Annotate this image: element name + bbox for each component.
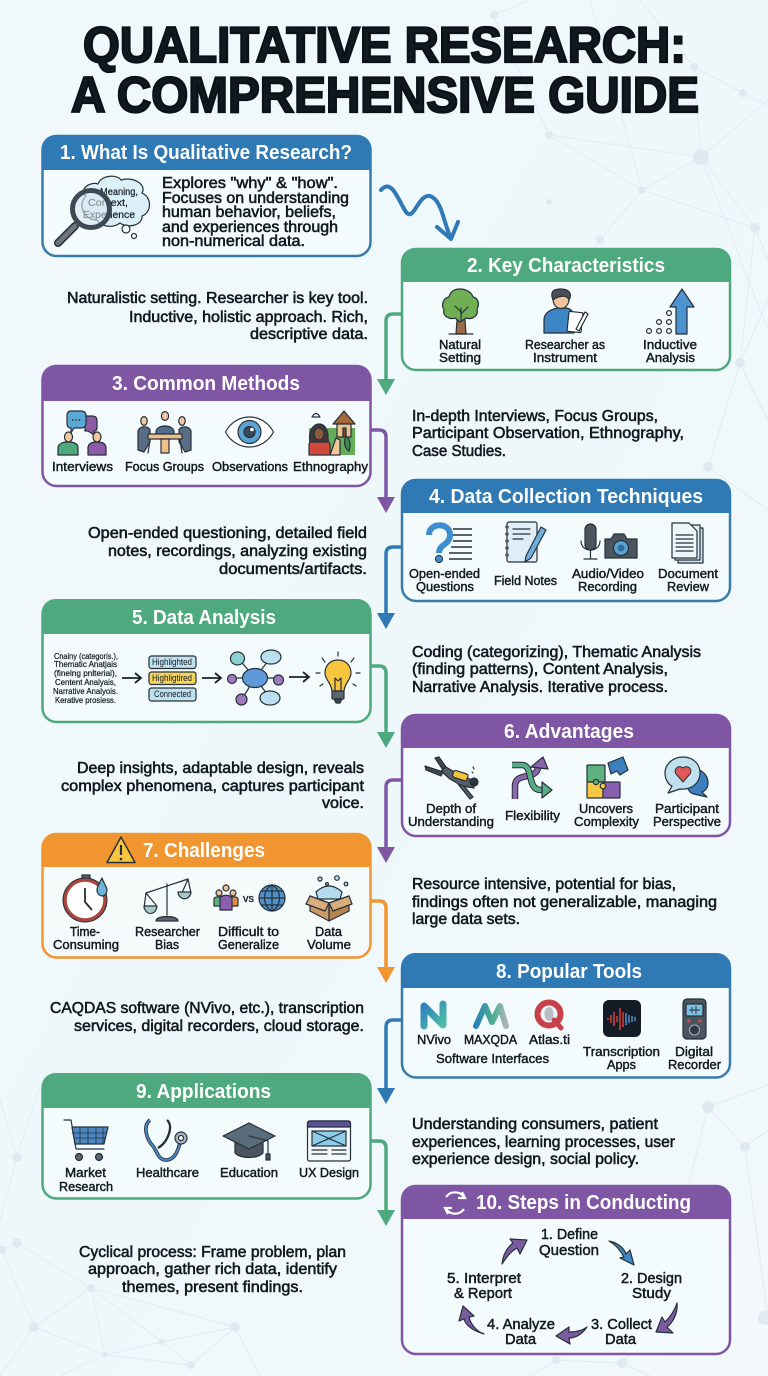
label: Transcription (583, 1045, 660, 1059)
label: Data (315, 925, 342, 939)
text block: common methods summary: Case Studies. (412, 443, 506, 460)
step labels: 1. Define (541, 1227, 598, 1243)
label: Healthcare (136, 1166, 199, 1180)
small text: Centent Analyais, (55, 678, 116, 687)
description: Focuses on understanding (162, 190, 349, 207)
text block: common methods summary (412, 408, 684, 460)
icon: magnifier over thought cloud (58, 176, 150, 243)
text block: popular tools summary (50, 1000, 364, 1035)
icon: cycle (445, 1192, 465, 1214)
label: Researcher (135, 925, 200, 939)
step labels: Question (539, 1243, 599, 1259)
arrow: section 6 to 7 (377, 780, 401, 863)
label: Uncovers (579, 802, 633, 816)
label: Software Interfaces (436, 1052, 549, 1066)
arrow: 3 to 4 (556, 1327, 587, 1344)
label: Natural (439, 338, 481, 352)
icon: Atlas.ti logo (538, 1002, 561, 1028)
label: MAXQDA (464, 1033, 518, 1047)
label (439, 338, 697, 365)
step labels: Study (632, 1286, 672, 1302)
heading: 1. What Is Qualitative Research? (60, 142, 352, 164)
icon: tree (443, 289, 478, 334)
icon: light bulb (316, 652, 360, 703)
step labels (447, 1227, 682, 1348)
label: Document (658, 567, 719, 581)
small text: Narrative Analyois. (53, 687, 118, 696)
icon: UX wireframe (308, 1121, 350, 1161)
description (162, 175, 349, 250)
label (417, 1033, 721, 1072)
arrow: 4 to 5 (459, 1306, 484, 1334)
label: Researcher as (525, 338, 605, 352)
text block: key characteristics summary (67, 290, 368, 343)
text block: data collection summary: notes, recordings, analyzing existing (108, 543, 367, 560)
icon: magnifier over thought cloud: Experience (83, 209, 135, 221)
label: Consuming (53, 938, 119, 952)
label: Time- (70, 925, 100, 939)
label: Interviews (52, 460, 113, 474)
text block: data collection summary: documents/artifacts. (219, 561, 367, 578)
label (53, 925, 351, 952)
label: Generalize (218, 938, 279, 952)
text block: data analysis summary: Narrative Analysis. Iterative process. (412, 679, 668, 696)
label: Instrument (533, 351, 598, 365)
text block: challenges summary: Resource intensive, potential for bias, (412, 876, 676, 893)
text block: challenges summary: findings often not generalizable, managing (412, 894, 717, 911)
label: Difficult to (218, 925, 279, 939)
label: Setting (439, 351, 481, 365)
heading: 9. Applications (136, 1081, 271, 1103)
label: Audio/Video (572, 567, 644, 581)
text block: common methods summary: Participant Observation, Ethnography, (412, 425, 684, 442)
icon: shopping cart (64, 1120, 108, 1160)
label: Digital (675, 1045, 713, 1059)
arrow: section 4 to 5 (377, 547, 401, 629)
heading: 5. Data Analysis (132, 607, 276, 629)
text block: applications summary: experience design, social policy. (412, 1151, 639, 1168)
step labels: 5. Interpret (447, 1271, 521, 1287)
label: UX Design (299, 1166, 359, 1180)
icon: diver (425, 757, 478, 799)
text block: advantages summary (61, 760, 365, 812)
description: human behavior, beliefs, (162, 204, 336, 221)
small text: Cnainy (categoris.), (54, 652, 118, 661)
small text (53, 652, 118, 705)
icon: graduation cap (223, 1123, 275, 1160)
icon: document review (672, 523, 703, 563)
arrow (289, 672, 309, 682)
step labels: Data (605, 1332, 637, 1348)
arrow: 2 to 3 (656, 1303, 677, 1333)
panel: steps in conducting (401, 1185, 731, 1354)
text block: steps summary: themes, present findings. (122, 1279, 303, 1296)
label: Flexibility (505, 809, 561, 823)
panel: applications (42, 1073, 372, 1198)
label (52, 460, 369, 474)
icon: ethnography (309, 411, 355, 455)
text block: key characteristics summary: descriptive data. (250, 326, 368, 343)
panel: what is qualitative research (42, 135, 372, 256)
heading: 8. Popular Tools (496, 961, 642, 983)
arrow: 5 to 1 (502, 1239, 527, 1264)
text block: challenges summary (412, 876, 717, 928)
panel: challenges (42, 833, 372, 958)
heading: 3. Common Methods (112, 373, 300, 395)
icon: field notes (505, 522, 546, 562)
heading: 2. Key Characteristics (467, 255, 665, 277)
text block: data analysis summary (412, 644, 701, 696)
arrow: section 3 to 4 (371, 430, 395, 513)
icon: MAXQDA logo (476, 1006, 506, 1026)
text block: applications summary (412, 1116, 675, 1168)
arrow: section 2 to 3 (377, 314, 401, 395)
label: Open-ended (409, 567, 480, 581)
label: Observations (212, 460, 288, 474)
label: Complexity (574, 815, 640, 829)
heading: 10. Steps in Conducting (476, 1192, 691, 1214)
small text: Thematic Anatjais (54, 660, 117, 669)
tags (149, 656, 196, 701)
arrow: section 5 to 6 (371, 666, 395, 748)
icon: chat heart (665, 757, 708, 797)
icon: network (228, 650, 284, 705)
arrow: squiggle from section 1 to section 2 (381, 187, 458, 239)
label: Questions (416, 580, 474, 594)
icon: magnifier over thought cloud: Meaning, (100, 186, 138, 198)
arrow (122, 673, 141, 683)
panel: advantages (401, 714, 731, 836)
text block: advantages summary: voice. (322, 795, 364, 812)
label (408, 802, 721, 829)
panel: data collection techniques (401, 479, 731, 601)
icon: people vs globe: vs (243, 893, 254, 905)
heading: 6. Advantages (504, 721, 634, 743)
arrow: section 8 to 9 (377, 1020, 401, 1104)
icon: stethoscope (146, 1120, 187, 1160)
panel: popular tools (401, 953, 731, 1078)
label: Analysis (646, 351, 695, 365)
icon: researcher (544, 289, 588, 333)
step labels: 2. Design (621, 1271, 682, 1287)
label: Atlas.ti (529, 1033, 570, 1047)
text block: data analysis summary: (finding patterns), Content Analysis, (412, 661, 668, 678)
label (59, 1166, 359, 1194)
step labels: Data (505, 1332, 537, 1348)
description: Explores "why" & "how". (162, 175, 338, 192)
panel: common methods (42, 365, 372, 486)
small text: (finelng pnlterial), (54, 669, 117, 678)
text block: data analysis summary: Coding (categorizing), Thematic Analysis (412, 644, 701, 661)
icon: scale (144, 879, 191, 921)
small text: Kerative prosiess. (55, 696, 116, 705)
label: Depth of (426, 802, 477, 816)
arrow: 1 to 2 (609, 1241, 634, 1265)
title: QUALITATIVE RESEARCH: (83, 17, 686, 73)
arrow (202, 673, 221, 683)
label: Market (65, 1166, 107, 1180)
tags: Connected (154, 689, 191, 699)
label: Apps (607, 1058, 636, 1072)
icon: people vs globe (214, 885, 285, 911)
label: Understanding (408, 815, 494, 829)
label: Focus Groups (125, 460, 204, 474)
text block: key characteristics summary: Naturalistic setting. Researcher is key tool. (67, 290, 368, 307)
text block: data collection summary (88, 525, 367, 578)
tags: Highligtired (152, 673, 192, 683)
text block: applications summary: Understanding consumers, patient (412, 1116, 659, 1133)
label: Bias (155, 938, 179, 952)
icon: puzzle (587, 757, 628, 798)
text block: popular tools summary: services, digital recorders, cloud storage. (74, 1018, 364, 1035)
step labels: 4. Analyze (487, 1317, 555, 1333)
description: and experiences through (162, 219, 338, 236)
step labels: 3. Collect (591, 1317, 652, 1333)
text block: key characteristics summary: Inductive, holistic approach. Rich, (129, 309, 368, 326)
text block: advantages summary: complex phenomena, captures participant (61, 778, 365, 795)
text block: steps summary: Cyclical process: Frame problem, plan (79, 1244, 346, 1261)
label: Field Notes (494, 574, 557, 588)
icon: magnifier over thought cloud: Context, (88, 197, 128, 209)
icon: warning (107, 837, 135, 862)
heading: 4. Data Collection Techniques (429, 486, 703, 508)
step labels: & Report (454, 1286, 512, 1302)
icon: transcription app (603, 1000, 641, 1037)
icon: NVivo logo (424, 1004, 443, 1026)
label: Inductive (643, 338, 697, 352)
icon: inductive arrow (647, 289, 694, 334)
icon: eye (226, 417, 274, 447)
label: Participant (655, 802, 720, 816)
label: Volume (307, 938, 351, 952)
panel: data analysis (42, 599, 372, 722)
text block: data collection summary: Open-ended questioning, detailed field (88, 525, 367, 542)
title: A COMPREHENSIVE GUIDE (71, 67, 699, 123)
text block: popular tools summary: CAQDAS software (NVivo, etc.), transcription (50, 1000, 364, 1017)
icon: digital recorder (683, 999, 706, 1039)
icon: crossing arrows (512, 757, 552, 799)
label (409, 567, 719, 594)
icon: microphone and camera (581, 524, 637, 559)
label: Ethnography (293, 460, 369, 474)
text block: advantages summary: Deep insights, adaptable design, reveals (77, 760, 364, 777)
heading: 7. Challenges (143, 840, 265, 862)
label: Recorder (668, 1058, 721, 1072)
text block: steps summary: approach, gather rich data, identify (88, 1261, 337, 1278)
text block: steps summary (79, 1244, 346, 1296)
icon: box (306, 876, 352, 921)
text block: applications summary: experiences, learning processes, user (412, 1134, 675, 1151)
icon: focus groups (138, 412, 191, 453)
text block: challenges summary: large data sets. (412, 911, 520, 928)
label: Research (59, 1180, 113, 1194)
arrow: section 7 to 8 (371, 901, 395, 983)
label: NVivo (417, 1033, 451, 1047)
label: Perspective (653, 815, 721, 829)
tags: Highlighted (152, 657, 192, 667)
title (71, 17, 699, 123)
label: Education (220, 1166, 278, 1180)
description: non-numerical data. (162, 233, 305, 250)
icon: interviews (58, 411, 106, 455)
text block: common methods summary: In-depth Interviews, Focus Groups, (412, 408, 658, 425)
icon: question (429, 525, 472, 563)
icon: stopwatch (63, 875, 107, 922)
label: Review (667, 580, 710, 594)
label: Recording (578, 580, 637, 594)
panel: key characteristics (401, 248, 731, 370)
arrow: section 9 to 10 (371, 1141, 395, 1226)
